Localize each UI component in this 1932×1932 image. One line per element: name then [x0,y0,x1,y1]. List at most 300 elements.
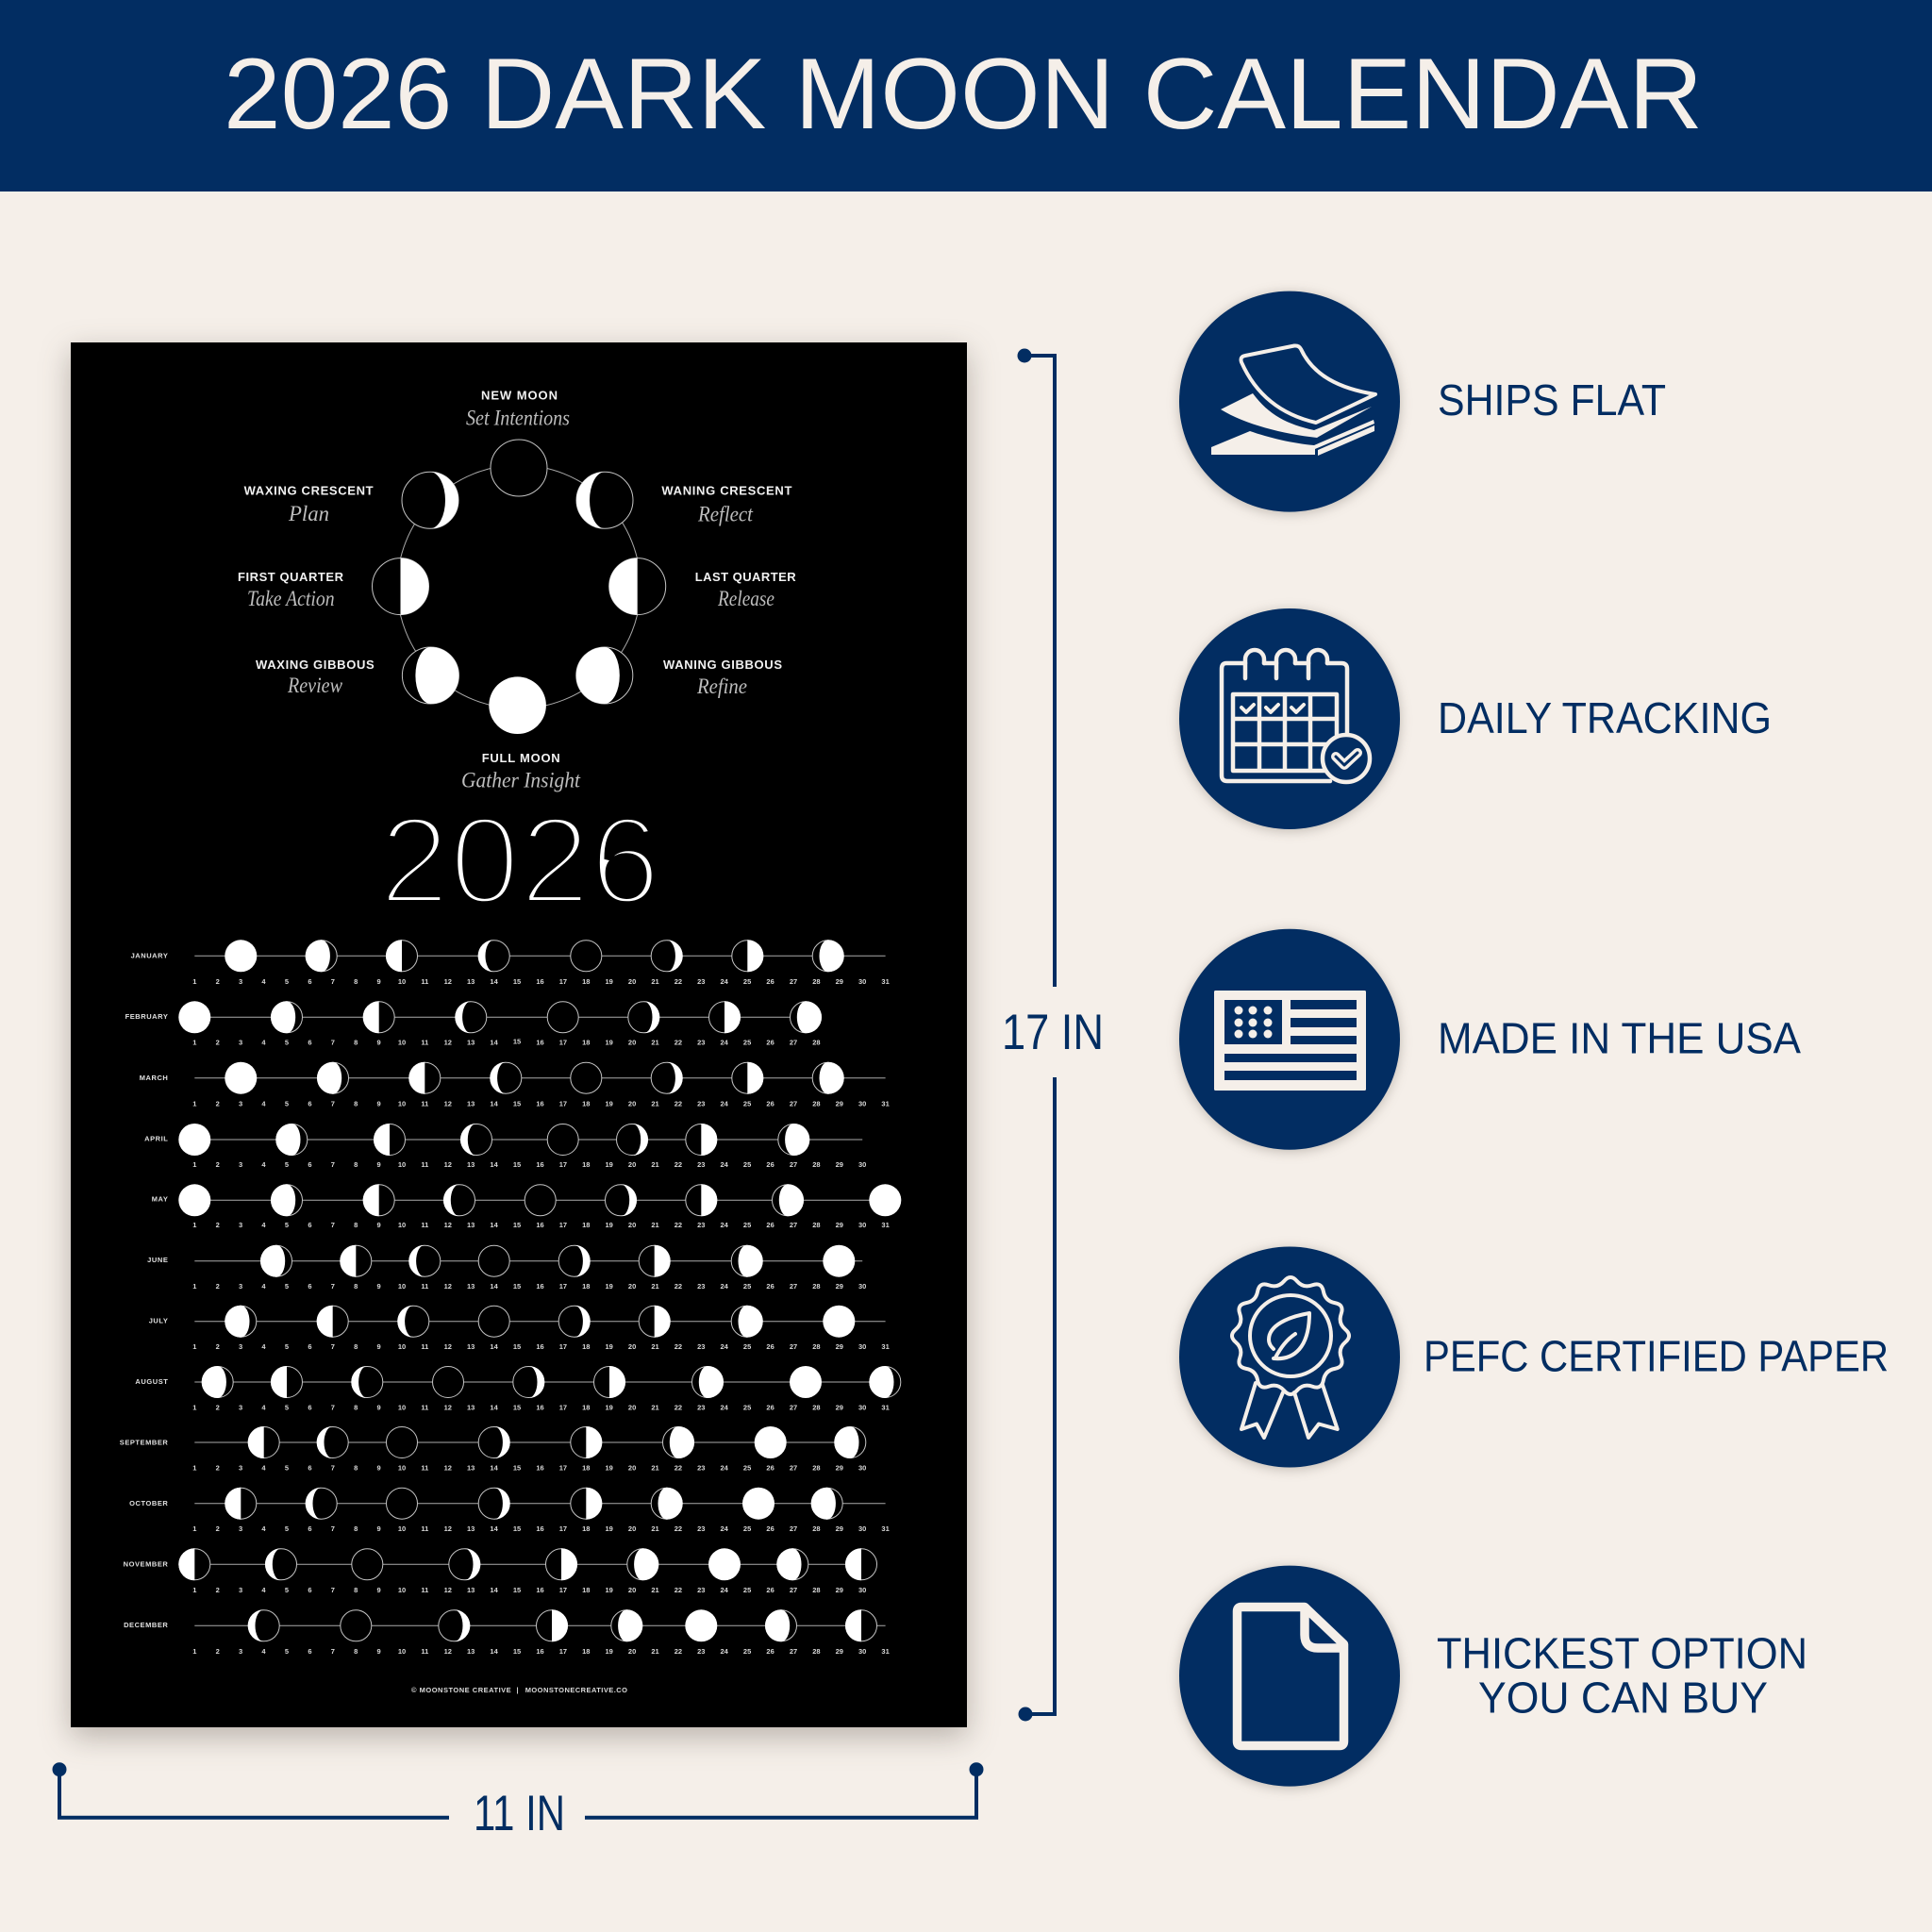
month row: January: 28 [812,977,821,986]
month row: September: 14 [490,1464,499,1473]
month row: October: 18 [582,1524,590,1533]
month row: June: JUNE [147,1256,168,1264]
month row: November: 17 [559,1586,567,1594]
month row: January: 15 [513,977,521,986]
month row: September: 6 [308,1464,311,1473]
label: waxing gibbous: Review [287,674,343,697]
month row: October: 12 [444,1524,452,1533]
month row: April: 24 [721,1160,729,1169]
month row: March: 20 [628,1100,636,1108]
month row: September: SEPTEMBER [120,1438,168,1446]
month row: April: 18 [582,1160,590,1169]
month row: February: 18 [582,1039,590,1047]
month row: November: 6 [308,1586,311,1594]
label: first quarter [238,570,344,610]
phase labels [238,389,796,792]
month row: December: 30 [858,1647,866,1656]
month row: July: 2 [216,1342,220,1351]
moon: waning gibbous [576,647,633,704]
month row: March [140,1062,890,1108]
month row: September: 28 [812,1464,821,1473]
month row: May: MAY [152,1195,168,1204]
month row: February: 20 [628,1039,636,1047]
month row: November: 15 [513,1586,521,1594]
month row: June: 22 [675,1282,682,1291]
month row: February [125,1001,822,1047]
month row: October: 31 [881,1524,890,1533]
month row: December: 26 [766,1647,774,1656]
month row: February: 13 [467,1039,475,1047]
icon: stacked paper sheets [1211,345,1375,456]
poster footer credit [411,1686,627,1694]
month row: April: 11 [421,1160,428,1169]
month row: September: 27 [790,1464,797,1473]
month row: April: 27 [790,1160,797,1169]
month row: January: 17 [559,977,567,986]
month row: April: 10 [398,1160,406,1169]
month row: June: 18 [582,1282,590,1291]
month row: December: 15 [513,1647,521,1656]
month row: July: 22 [675,1342,682,1351]
month row: November: 1 [192,1586,196,1594]
month row: December: 16 [536,1647,544,1656]
month row: May: 24 [721,1221,729,1229]
month row: April: 6 [308,1160,311,1169]
month row: June: 21 [651,1282,659,1291]
month row: February: 12 [444,1039,452,1047]
month row: September: 7 [331,1464,335,1473]
feature: ships flat [1179,291,1666,512]
month row: September: 12 [444,1464,452,1473]
month row: May: 5 [285,1221,289,1229]
feature: made in the usa [1179,929,1801,1150]
month row: October: 14 [490,1524,499,1533]
month row: August: AUGUST [135,1377,168,1386]
feature label [1437,1628,1807,1723]
month row: July: 11 [421,1342,428,1351]
label: waning gibbous: Refine [696,675,747,698]
month row: August: 10 [398,1404,406,1412]
month row: November: 18 [582,1586,590,1594]
month row: December: 27 [790,1647,797,1656]
month row: August: 14 [490,1404,499,1412]
month row: January: 31 [881,977,890,986]
month row: September: 19 [606,1464,613,1473]
month row: October: 13 [467,1524,475,1533]
month row: March: 7 [331,1100,335,1108]
month row: May [152,1184,901,1229]
month row: June: 25 [743,1282,751,1291]
month row: September: 16 [536,1464,544,1473]
month row: July: 10 [398,1342,406,1351]
month row: August: 3 [239,1404,242,1412]
month row: August: 12 [444,1404,452,1412]
month row: April: 30 [858,1160,866,1169]
month row: October: 22 [675,1524,682,1533]
month row: February: 1 [192,1039,196,1047]
month row: February: 3 [239,1039,242,1047]
month row: May: 16 [536,1221,544,1229]
month row: November: 28 [812,1586,821,1594]
month row: April: 20 [628,1160,636,1169]
month row: January: JANUARY [131,952,168,960]
month row: April: 1 [192,1160,196,1169]
label: first quarter: FIRST QUARTER [238,570,344,584]
month row: May: 10 [398,1221,406,1229]
month row: April: 14 [490,1160,499,1169]
month row: January: 10 [398,977,406,986]
month row: August: 2 [216,1404,220,1412]
month row: July: 8 [354,1342,358,1351]
month row: March: 24 [721,1100,729,1108]
month row: April: 23 [697,1160,705,1169]
month row: January: 14 [490,977,499,986]
month row: October: 17 [559,1524,567,1533]
month row: February: 11 [421,1039,428,1047]
month row: November: 8 [354,1586,358,1594]
title: 2026 DARK MOON CALENDAR [224,37,1703,150]
month row: April: 8 [354,1160,358,1169]
month row: August: 20 [628,1404,636,1412]
month row: October: 5 [285,1524,289,1533]
month row: March: 28 [812,1100,821,1108]
month row: March: 9 [377,1100,381,1108]
month row: July: 4 [261,1342,266,1351]
month row: August: 29 [836,1404,843,1412]
month row: October: 26 [766,1524,774,1533]
month row: March: 26 [766,1100,774,1108]
month row: September: 20 [628,1464,636,1473]
month row: July: 17 [559,1342,567,1351]
month row: October: 3 [239,1524,242,1533]
month row: October: OCTOBER [129,1499,168,1507]
month row: January: 4 [261,977,266,986]
month row: October: 24 [721,1524,729,1533]
month row: April: 9 [377,1160,381,1169]
month row: December [124,1609,890,1656]
month row: June: 16 [536,1282,544,1291]
month row: November: 2 [216,1586,220,1594]
month row: February: 21 [651,1039,659,1047]
month row: March: 29 [836,1100,843,1108]
month row: June: 27 [790,1282,797,1291]
month row: January: 6 [308,977,311,986]
icon: usa flag [1214,991,1366,1091]
month row: April: 7 [331,1160,335,1169]
month row: April: 17 [559,1160,567,1169]
month row: November: 5 [285,1586,289,1594]
month row: March: 27 [790,1100,797,1108]
month row: April: 3 [239,1160,242,1169]
label: last quarter: Release [717,587,774,610]
feature: pefc certified paper [1179,1247,1889,1468]
month row: May: 4 [261,1221,266,1229]
month row: March: 6 [308,1100,311,1108]
month row: July: 25 [743,1342,751,1351]
month row: February: 26 [766,1039,774,1047]
month row: May: 14 [490,1221,499,1229]
month row: October: 10 [398,1524,406,1533]
month row: August: 19 [606,1404,613,1412]
month row: June: 28 [812,1282,821,1291]
month row: January: 16 [536,977,544,986]
month row: August: 8 [354,1404,358,1412]
month row: May: 26 [766,1221,774,1229]
month row: April [144,1124,866,1169]
month row: December: 12 [444,1647,452,1656]
month row: January [131,940,890,986]
month row: October: 28 [812,1524,821,1533]
month row: November [124,1548,876,1594]
month row: April: 15 [513,1160,521,1169]
feature label: MADE IN THE USA [1438,1013,1801,1062]
month row: August: 27 [790,1404,797,1412]
month row: November: 29 [836,1586,843,1594]
moon: new [491,440,547,496]
month row: January: 1 [192,977,196,986]
month row: May: 7 [331,1221,335,1229]
month row: December: 5 [285,1647,289,1656]
month row: February: 8 [354,1039,358,1047]
month row: May: 12 [444,1221,452,1229]
month row: June: 4 [261,1282,266,1291]
month row: August: 9 [377,1404,381,1412]
icon: rosette with leaf [1232,1277,1349,1438]
month row: November: 14 [490,1586,499,1594]
month row: July [149,1306,890,1351]
month row: December: 10 [398,1647,406,1656]
month row: November: 11 [421,1586,428,1594]
month row: April: 26 [766,1160,774,1169]
month row: September: 30 [858,1464,866,1473]
month row: October: 23 [697,1524,705,1533]
label: full moon [461,751,581,792]
month row: August: 17 [559,1404,567,1412]
month row: January: 22 [675,977,682,986]
month row: December: 21 [651,1647,659,1656]
month row: December: 18 [582,1647,590,1656]
month row: June: 3 [239,1282,242,1291]
month row: May: 30 [858,1221,866,1229]
month row: January: 25 [743,977,751,986]
month row: May: 1 [192,1221,196,1229]
month row: January: 27 [790,977,797,986]
month row: February: 24 [721,1039,729,1047]
month row: April: 16 [536,1160,544,1169]
month row: December: 4 [261,1647,266,1656]
month row: November: 25 [743,1586,751,1594]
month row: September: 3 [239,1464,242,1473]
month row: November: 12 [444,1586,452,1594]
month row: October: 2 [216,1524,220,1533]
month row: September: 13 [467,1464,475,1473]
month row: December: DECEMBER [124,1621,168,1629]
month row: November: 13 [467,1586,475,1594]
month row: June: 1 [192,1282,196,1291]
month row: March: 31 [881,1100,890,1108]
month row: February: 19 [606,1039,613,1047]
month row: August: 15 [513,1404,521,1412]
month row: October: 21 [651,1524,659,1533]
month row: December: 7 [331,1647,335,1656]
month row: October: 8 [354,1524,358,1533]
feature: thickest option [1179,1566,1807,1787]
month row: January: 18 [582,977,590,986]
month row: March: 13 [467,1100,475,1108]
month row: September: 22 [675,1464,682,1473]
month row: August: 16 [536,1404,544,1412]
month row: May: 29 [836,1221,843,1229]
month row: July: 27 [790,1342,797,1351]
month row: July: 21 [651,1342,659,1351]
month row: March: 19 [606,1100,613,1108]
month row: June: 30 [858,1282,866,1291]
month row: December: 23 [697,1647,705,1656]
month row: August: 7 [331,1404,335,1412]
month row: March: MARCH [140,1074,168,1082]
month row: August: 1 [192,1404,196,1412]
month row: September: 24 [721,1464,729,1473]
month row: October: 29 [836,1524,843,1533]
label: waxing crescent: WAXING CRESCENT [244,484,374,498]
moon: waxing gibbous [402,647,458,704]
month row: February: 9 [377,1039,381,1047]
label: waxing gibbous [256,658,375,697]
panel: black moon calendar poster [71,342,967,1727]
month row: January: 11 [421,977,428,986]
month row: July: 5 [285,1342,289,1351]
month row: September: 2 [216,1464,220,1473]
month row: May: 25 [743,1221,751,1229]
moon: full [489,676,546,734]
month row: December: 22 [675,1647,682,1656]
month row: December: 3 [239,1647,242,1656]
month row: February: 10 [398,1039,406,1047]
month row: June: 17 [559,1282,567,1291]
month row: September: 17 [559,1464,567,1473]
month row: August: 5 [285,1404,289,1412]
month row: September: 26 [766,1464,774,1473]
month row: September: 9 [377,1464,381,1473]
month row: June: 23 [697,1282,705,1291]
month row: December: 14 [490,1647,499,1656]
month row: February: 17 [559,1039,567,1047]
month row: May: 28 [812,1221,821,1229]
month row: July: 30 [858,1342,866,1351]
month row: August: 21 [651,1404,659,1412]
month row: March: 21 [651,1100,659,1108]
month row: March: 1 [192,1100,196,1108]
month row: October: 15 [513,1524,521,1533]
month row: June: 5 [285,1282,289,1291]
month row: November: 16 [536,1586,544,1594]
month row: September: 10 [398,1464,406,1473]
month row: December: 24 [721,1647,729,1656]
month row: February: 2 [216,1039,220,1047]
month row: November: 22 [675,1586,682,1594]
month row: February: 6 [308,1039,311,1047]
month row: June: 19 [606,1282,613,1291]
month row: January: 7 [331,977,335,986]
month row: June: 8 [354,1282,358,1291]
month row: July: 3 [239,1342,242,1351]
month row: July: 19 [606,1342,613,1351]
feature label: THICKEST OPTION [1437,1628,1807,1677]
month row: February: 27 [790,1039,797,1047]
month row: July: 9 [377,1342,381,1351]
moon: waxing crescent [402,472,458,528]
month row: October: 6 [308,1524,311,1533]
month row: September: 15 [513,1464,521,1473]
month row: April: 28 [812,1160,821,1169]
month row: August [135,1366,901,1412]
month row: July: 28 [812,1342,821,1351]
month row: May: 3 [239,1221,242,1229]
month row: February: 14 [490,1039,499,1047]
feature: daily tracking [1179,608,1772,829]
label: full moon: FULL MOON [482,751,560,765]
month row: March: 18 [582,1100,590,1108]
month row: November: 23 [697,1586,705,1594]
month row: March: 3 [239,1100,242,1108]
month row: June: 20 [628,1282,636,1291]
month row: July: 14 [490,1342,499,1351]
month row: February: 22 [675,1039,682,1047]
label: new moon: Set Intentions [466,406,570,430]
month row: June: 9 [377,1282,381,1291]
month row: June: 7 [331,1282,335,1291]
month row: December: 2 [216,1647,220,1656]
month row: July: 6 [308,1342,311,1351]
month row: August: 6 [308,1404,311,1412]
month row: October: 4 [261,1524,266,1533]
moon: last quarter [609,558,666,615]
month row: January: 21 [651,977,659,986]
month row: February: 15 [513,1038,521,1046]
month row: June: 11 [421,1282,428,1291]
month row: November: NOVEMBER [124,1559,168,1568]
month row: July: 23 [697,1342,705,1351]
month row: December: 13 [467,1647,475,1656]
month row: December: 17 [559,1647,567,1656]
month row: October: 9 [377,1524,381,1533]
month row: October [129,1488,890,1533]
month row: December: 9 [377,1647,381,1656]
month row: June: 15 [513,1282,521,1291]
month row: April: 12 [444,1160,452,1169]
month row: June: 14 [490,1282,499,1291]
month row: June: 24 [721,1282,729,1291]
label: full moon: Gather Insight [461,768,581,792]
label: 11 in: 11 IN [474,1786,565,1841]
month row: May: 2 [216,1221,220,1229]
month row: March: 22 [675,1100,682,1108]
month row: November: 7 [331,1586,335,1594]
month row: January: 8 [354,977,358,986]
feature label: SHIPS FLAT [1438,375,1666,425]
month row: October: 30 [858,1524,866,1533]
month row: March: 30 [858,1100,866,1108]
month row: May: 11 [421,1221,428,1229]
month row: September: 18 [582,1464,590,1473]
month row: September: 21 [651,1464,659,1473]
month row: October: 16 [536,1524,544,1533]
month row: August: 24 [721,1404,729,1412]
month row: December: 19 [606,1647,613,1656]
month row: September: 5 [285,1464,289,1473]
month row: September [120,1426,866,1473]
month row: July: 29 [836,1342,843,1351]
